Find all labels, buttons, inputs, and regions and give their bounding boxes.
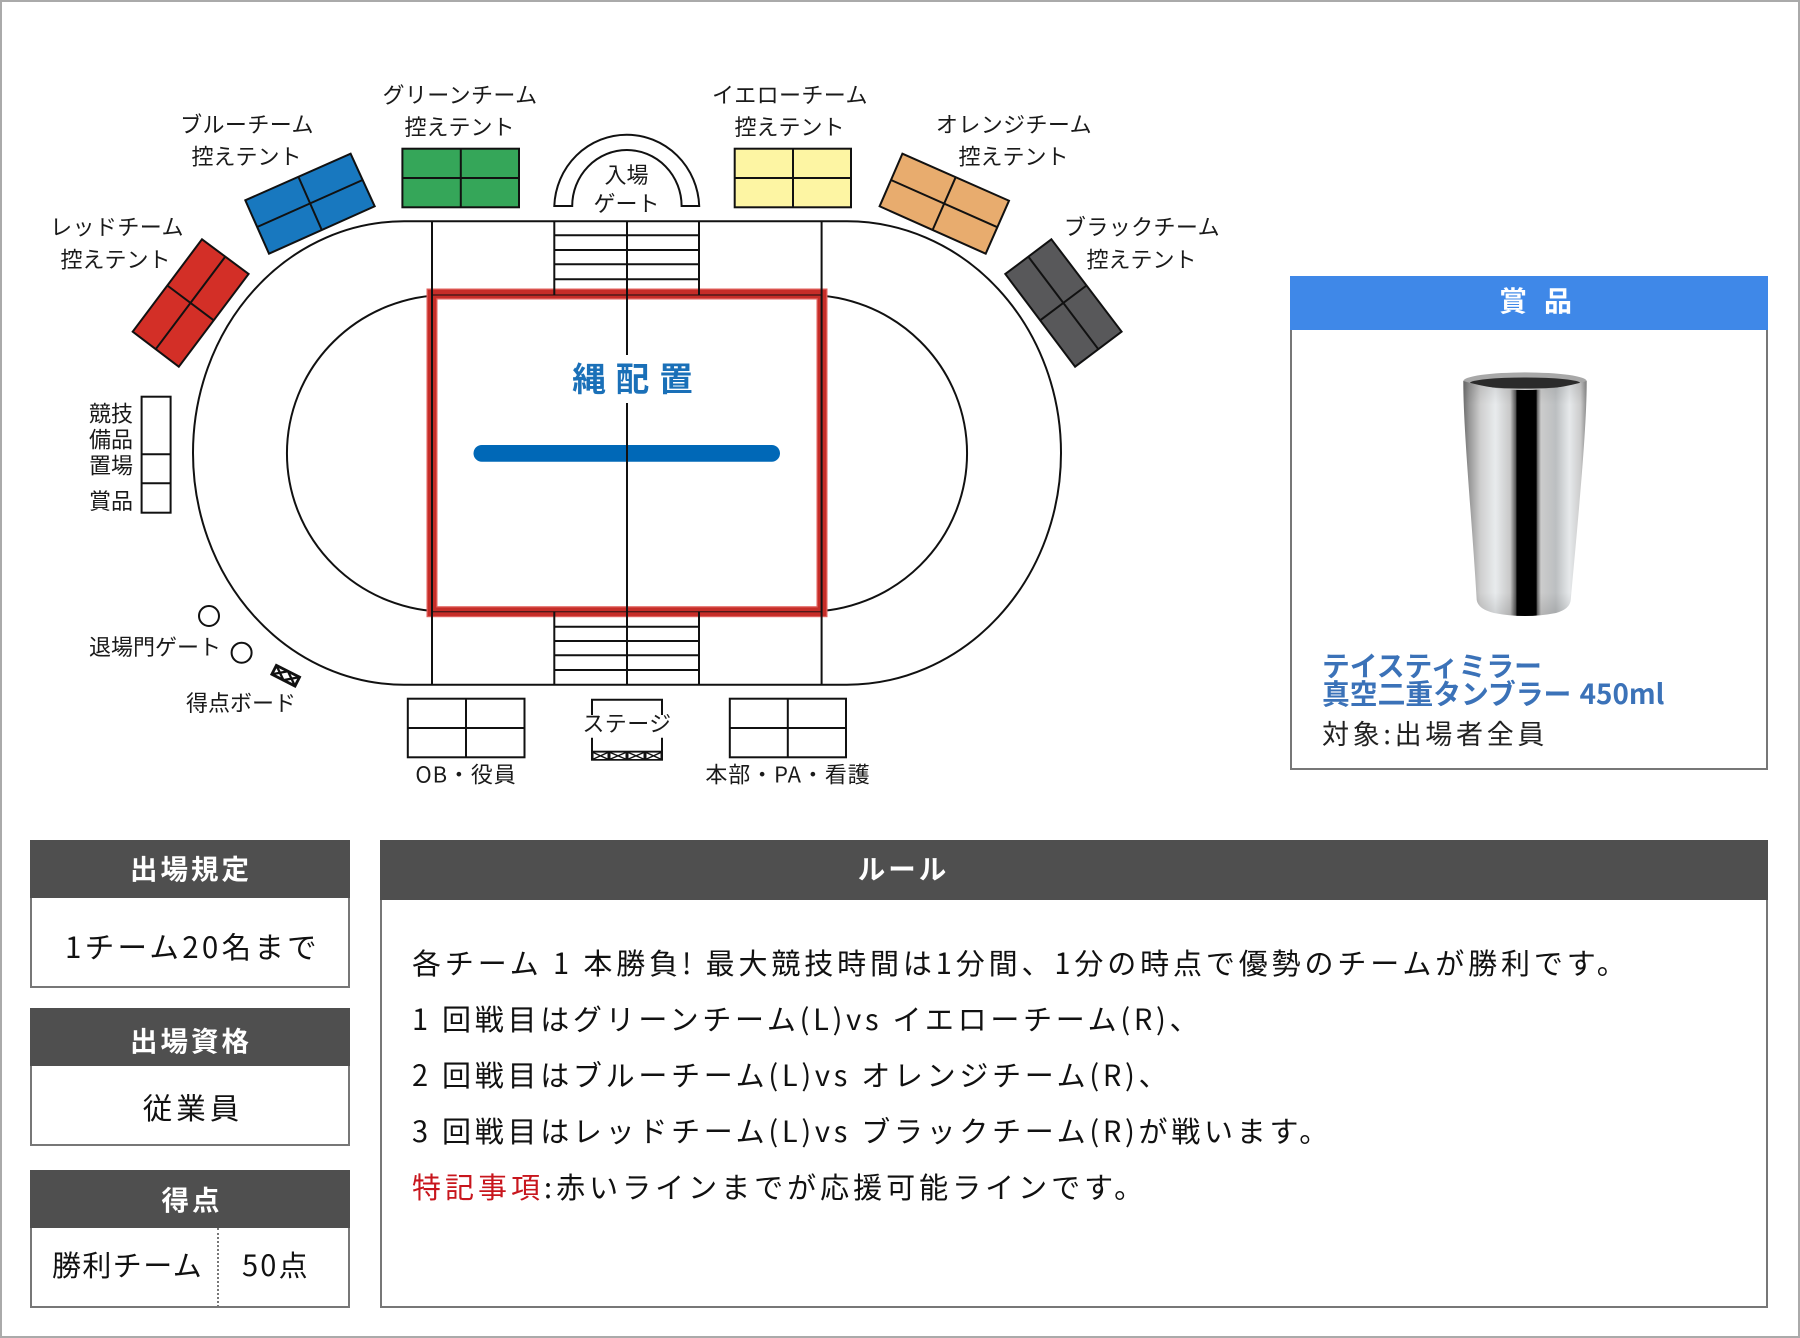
orange tent label: オレンジチーム: [936, 108, 1092, 140]
entrance gate label: 入場: [604, 158, 649, 190]
entrance gate arch: [554, 135, 699, 206]
red tent label: レッドチーム: [50, 210, 184, 242]
OB and officers label: OB・役員: [415, 757, 517, 789]
rules text: 2 回戦目はブルーチーム(L)vs オレンジチーム(R)、: [412, 1053, 1171, 1095]
orange tent label: 控えテント: [958, 140, 1069, 172]
black tent label: [1064, 210, 1220, 274]
top stairs: [554, 221, 699, 295]
red tent label: 控えテント: [60, 242, 171, 274]
prize heading: [1290, 276, 1768, 330]
rules heading: [380, 840, 1768, 900]
entrance gate label: ゲート: [593, 186, 660, 218]
storage labels: [89, 397, 133, 516]
score label: 勝利チーム: [52, 1243, 203, 1285]
score board: [272, 665, 300, 686]
rules text: 1 回戦目はグリーンチーム(L)vs イエローチーム(R)、: [412, 997, 1202, 1039]
green tent label: 控えテント: [404, 110, 515, 142]
rules heading: ルール: [858, 847, 949, 887]
yellow tent: [735, 149, 851, 207]
entrance gate label: [593, 158, 660, 218]
equipment and prize storage: [142, 397, 171, 513]
score divider: [217, 1228, 219, 1307]
inner track: [287, 295, 967, 612]
panel: entry rule: [30, 840, 350, 988]
eligibility heading: 出場資格: [130, 1019, 252, 1059]
score heading: 得点: [162, 1178, 222, 1218]
orange tent label: [936, 108, 1092, 172]
orange tent: [880, 154, 1009, 254]
rules text: 各チーム 1 本勝負! 最大競技時間は1分間、1分の時点で優勢のチームが勝利です。: [412, 941, 1630, 983]
exit gate label: 退場門ゲート: [89, 630, 221, 662]
bottom stairs: [554, 612, 699, 685]
storage labels: 置場: [89, 448, 133, 480]
score board label: 得点ボード: [186, 686, 296, 718]
headquarters tent: [730, 699, 846, 757]
outer track: [193, 221, 1061, 685]
blue tent: [245, 154, 375, 254]
entry rule heading: [30, 840, 350, 898]
headquarters label: 本部・PA・看護: [705, 757, 871, 789]
entry rule heading: 出場規定: [130, 847, 252, 887]
green tent label: グリーンチーム: [382, 78, 538, 110]
black tent: [1005, 239, 1122, 367]
storage labels: 賞品: [89, 484, 133, 516]
prize heading: 賞品: [1499, 280, 1589, 320]
entry rule value: 1チーム20名まで: [65, 925, 320, 967]
black tent label: 控えテント: [1086, 242, 1197, 274]
venue map diagram: [50, 78, 1220, 789]
green tent label: [382, 78, 538, 142]
storage labels: 備品: [89, 422, 133, 454]
stage label: ステージ: [582, 706, 672, 738]
red tent label: [50, 210, 184, 274]
red support line frame: [432, 294, 822, 612]
blue tent label: [180, 108, 314, 172]
blue tent label: ブルーチーム: [180, 108, 314, 140]
rope placement title: 縄配置: [572, 352, 703, 401]
blue rope: [474, 445, 780, 462]
rules text: 3 回戦目はレッドチーム(L)vs ブラックチーム(R)が戦います。: [412, 1109, 1332, 1151]
yellow tent label: [712, 78, 868, 142]
field lines: [432, 221, 822, 685]
yellow tent label: 控えテント: [734, 110, 845, 142]
green tent: [402, 149, 519, 207]
panel: eligibility: [30, 1008, 350, 1146]
yellow tent label: イエローチーム: [712, 78, 868, 110]
score value: 50点: [242, 1243, 310, 1285]
panel: score: [30, 1170, 350, 1308]
score heading: [30, 1170, 350, 1228]
red tent: [133, 239, 249, 367]
prize target: 対象:出場者全員: [1322, 713, 1548, 752]
panel: rules: [380, 840, 1768, 1308]
eligibility heading: [30, 1008, 350, 1066]
OB and officers tent: [408, 699, 524, 757]
storage labels: 競技: [89, 397, 133, 429]
black tent label: ブラックチーム: [1064, 210, 1220, 242]
rules text: 特記事項:赤いラインまでが応援可能ラインです。: [412, 1165, 1147, 1207]
prize name: 真空二重タンブラー 450ml: [1322, 673, 1664, 713]
stage: [591, 700, 663, 761]
eligibility value: 従業員: [143, 1086, 243, 1128]
exit gate posts: [199, 606, 252, 663]
panel: prize: [1290, 276, 1768, 770]
icon: stainless tumbler: [1463, 372, 1587, 616]
blue tent label: 控えテント: [191, 140, 302, 172]
prize name: テイスティミラー: [1322, 645, 1542, 685]
prize name: [1322, 645, 1664, 713]
